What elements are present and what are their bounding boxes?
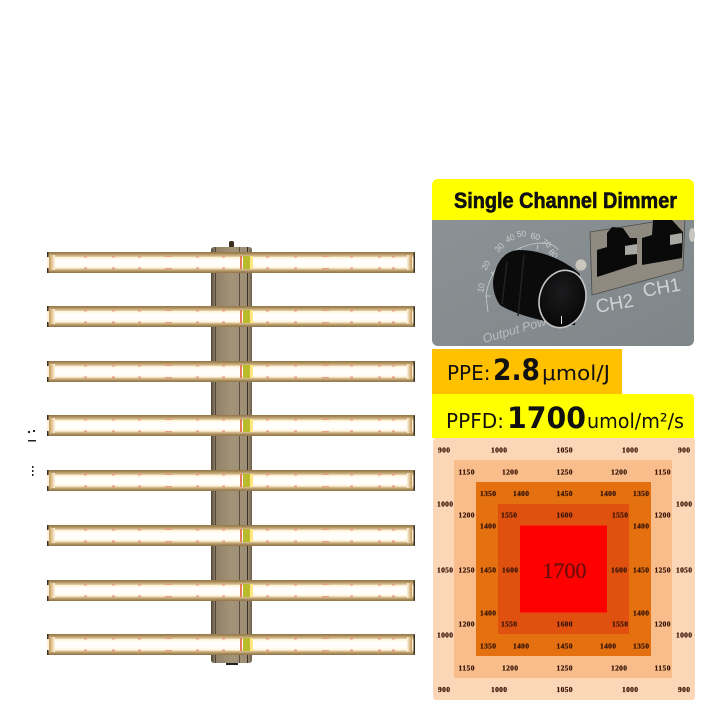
knob on top of spine (229, 241, 234, 248)
heat map values: 1150 (654, 468, 671, 476)
dial scale: 60 (529, 230, 541, 242)
PPFD banner: 1700 (507, 401, 586, 435)
heat map values: 1450 (556, 642, 573, 650)
heat map values: 1250 (556, 468, 573, 476)
light bar 8 (47, 634, 415, 655)
dial scale: 20 (479, 259, 493, 272)
light bar 1 (47, 252, 415, 273)
heat map values: 1000 (491, 446, 507, 454)
heat map values: 1550 (612, 510, 628, 520)
heat map values: 1400 (480, 608, 496, 618)
heat map values: 1150 (458, 468, 475, 476)
heat map values: 1450 (556, 489, 573, 498)
light bar 6 (47, 525, 415, 546)
heat map values: 1400 (600, 489, 616, 498)
heat map values: 1000 (491, 685, 507, 694)
centre value: 1700 (542, 558, 586, 583)
heat map values: 1600 (556, 620, 573, 628)
heat map values (437, 446, 692, 694)
heat map values: 1000 (676, 630, 692, 640)
heat map values: 1250 (654, 566, 671, 574)
heading banner: Single Channel Dimmer (454, 188, 677, 213)
heat map values: 1400 (633, 522, 649, 530)
heat map values: 1000 (676, 500, 692, 508)
heat map values: 1400 (513, 489, 529, 498)
centre zone (520, 526, 607, 612)
dimmer photo: CH1 (641, 275, 682, 302)
heat map values: 1200 (458, 620, 475, 628)
dial scale: 10 (475, 282, 487, 293)
port labels: CH2 (594, 291, 635, 318)
heat map values: 1600 (502, 566, 518, 574)
heat map values: 1350 (480, 642, 496, 650)
PPFD heat map (433, 438, 695, 700)
dial scale: 80 (546, 247, 560, 261)
heat map values: 1400 (633, 608, 649, 618)
heat map values: 1550 (501, 620, 517, 628)
heat map values: 1150 (654, 664, 671, 672)
heat map values: 1050 (556, 446, 573, 454)
PPE banner: 2.8 (493, 353, 540, 387)
heat map values: 1200 (458, 510, 475, 520)
heat map values: 900 (438, 446, 450, 454)
light bar 2 (47, 306, 415, 327)
light bar 5 (47, 470, 415, 491)
light bar 3 (47, 361, 415, 382)
heat map values: 1050 (676, 566, 692, 574)
PPE banner: μmol/J (542, 361, 610, 385)
dial scale: 30 (492, 240, 506, 254)
PPE banner (432, 349, 622, 394)
heat map values: 1000 (622, 685, 638, 694)
heat map values: 1200 (654, 620, 671, 628)
heat map values: 1050 (556, 685, 573, 694)
PPFD banner: umol/m²/s (587, 409, 684, 433)
heat map values: 1200 (611, 468, 627, 476)
heat map values: 1400 (480, 522, 496, 530)
LED grow light fixture (47, 241, 415, 665)
heat map values: 1000 (622, 446, 638, 454)
heat map values: 900 (678, 685, 690, 694)
heat map values: 1250 (556, 664, 573, 672)
heat map values: 1050 (437, 566, 453, 574)
heat map values: 1350 (633, 489, 649, 498)
heat map values: 1450 (633, 566, 649, 574)
PPFD banner: PPFD: (446, 409, 504, 433)
heat map values: 1400 (513, 642, 529, 650)
dimmer photo (432, 217, 695, 346)
heat map values: 1600 (556, 510, 573, 520)
heat map values: 1250 (458, 566, 475, 574)
heat map values: 900 (438, 685, 450, 694)
light bar 4 (47, 415, 415, 436)
side screw (689, 228, 695, 242)
heat map values: 1350 (480, 489, 496, 498)
zone 2 (454, 460, 672, 678)
heat map values: 900 (678, 446, 690, 454)
outer zone (433, 438, 695, 700)
dial scale: 50 (516, 228, 527, 239)
zone 4 (498, 504, 629, 634)
dial scale: 40 (504, 232, 517, 245)
heat map values: 1200 (611, 664, 627, 672)
mounting screw (575, 259, 587, 271)
heat map values: 1200 (654, 510, 671, 520)
heat map values: 1600 (611, 566, 627, 574)
dial scale: 70 (540, 236, 554, 250)
heat map values: 1400 (600, 642, 616, 650)
heat map values: 1200 (502, 664, 518, 672)
heat map values: 1350 (633, 642, 649, 650)
heat map values: 1000 (437, 630, 453, 640)
dimmer knob (493, 250, 592, 333)
dial scale (475, 228, 560, 312)
PPE banner: PPE: (447, 361, 490, 385)
central spine (211, 247, 252, 665)
light bar 7 (47, 580, 415, 601)
heat map values: 1450 (480, 566, 496, 574)
heat map values: 1550 (612, 620, 628, 628)
heat map values: 1150 (458, 664, 475, 672)
panel: single channel dimmer (432, 179, 695, 346)
label: output power: Output Power (481, 311, 559, 346)
stray marks left of the light (28, 430, 36, 476)
heat map values: 1550 (501, 510, 517, 520)
heading banner (432, 179, 694, 220)
zone 3 (476, 482, 651, 656)
dual network ports (590, 217, 685, 295)
heat map values: 1200 (502, 468, 518, 476)
PPFD banner (432, 394, 694, 438)
heat map values: 1000 (437, 500, 453, 508)
